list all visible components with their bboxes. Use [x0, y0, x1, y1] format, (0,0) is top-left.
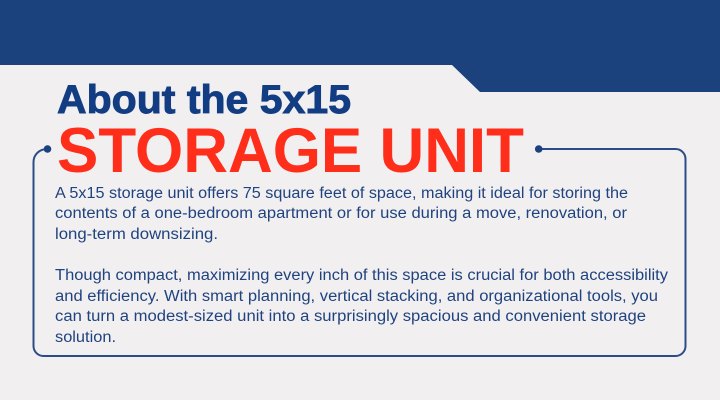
heading: About the 5x15: About the 5x15 [57, 78, 351, 122]
text block: first paragraph: long-term downsizing. [55, 226, 218, 243]
title [57, 78, 524, 186]
text block: second paragraph: solution. [55, 329, 116, 346]
header banner [0, 0, 720, 92]
heading: STORAGE UNIT: STORAGE UNIT [57, 116, 524, 186]
text block: first paragraph: contents of a one-bedroom apartment or for use during a move, renovation, or [55, 205, 627, 222]
text block: second paragraph: and efficiency. With smart planning, vertical stacking, and organizational tools, you [55, 288, 658, 305]
text block: second paragraph [55, 267, 668, 346]
text block: second paragraph: Though compact, maximizing every inch of this space is crucial for both accessibility [55, 267, 668, 284]
text block: first paragraph [55, 185, 628, 243]
panel: description frame with end dots [34, 145, 686, 356]
text block: first paragraph: A 5x15 storage unit offers 75 square feet of space, making it ideal for storing the [55, 185, 628, 202]
text block: second paragraph: can turn a modest-sized unit into a surprisingly spacious and convenient storage [55, 308, 646, 325]
